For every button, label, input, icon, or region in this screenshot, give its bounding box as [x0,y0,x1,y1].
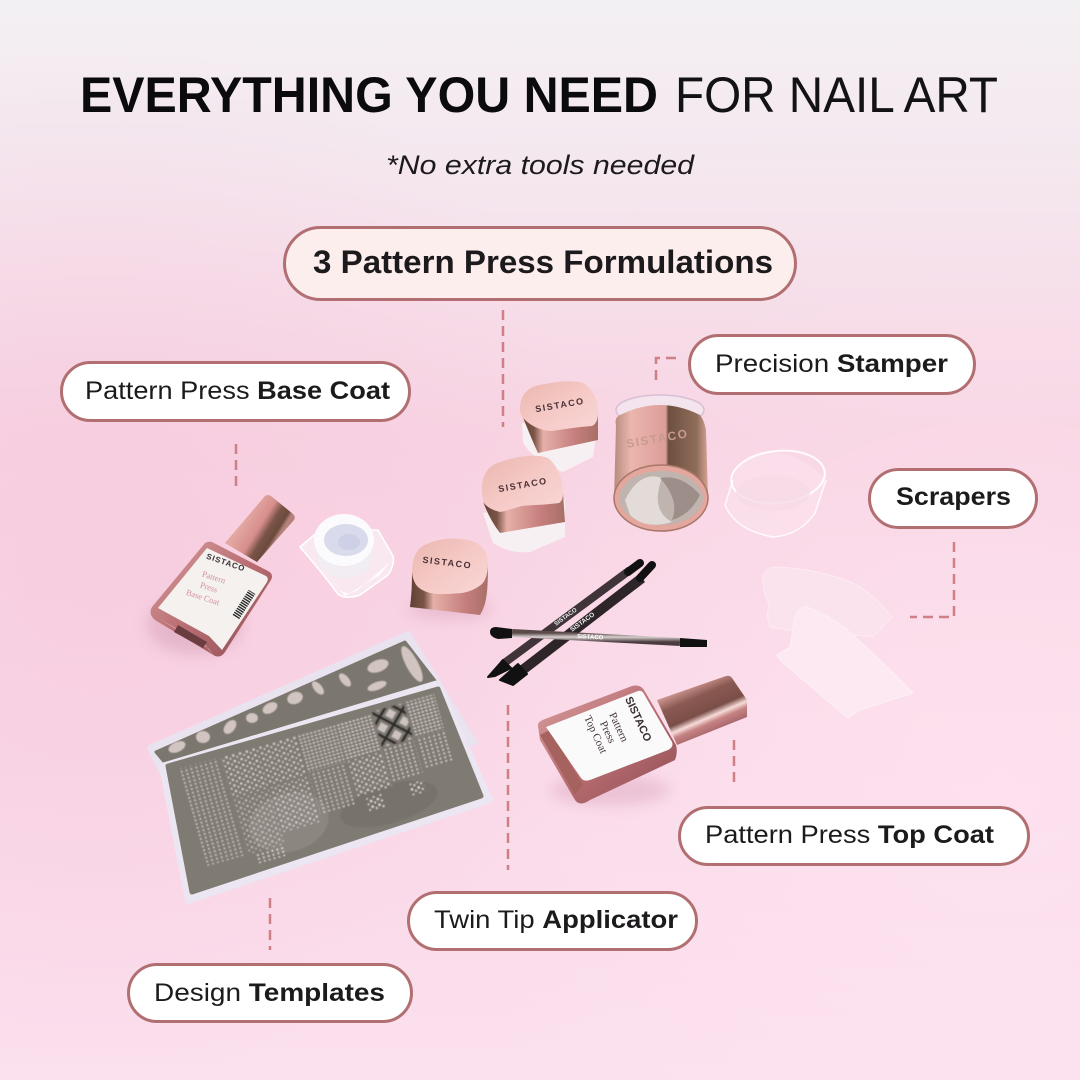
product: jar lid front [408,539,492,620]
bottle label [158,548,268,650]
bottle cap [225,495,295,562]
bottle body [538,686,677,804]
applicator diagonal one [488,563,640,677]
connector: scrapers [910,542,954,617]
connector: design templates [269,898,271,950]
product: top coat bottle: Top Coat [581,714,609,755]
label: Precision Stamper [690,336,974,394]
product: clear stamper cap [725,446,827,537]
product: precision stamper [614,395,708,532]
title: EVERYTHING YOU NEED [80,67,658,123]
scraper back [763,567,892,637]
label: Precision Stamper: Precision Stamper [715,350,948,378]
product: base coat bottle: Press [199,580,219,595]
product: design template plates [150,634,490,901]
product: top coat bottle: Press [597,719,618,745]
stamper clear head [616,395,704,425]
label: Twin Tip Applicator [408,892,696,950]
applicator diagonal two [500,565,652,685]
bottle shadow [147,595,243,655]
bottle body [151,542,272,656]
stamper body [614,405,708,532]
connector: top coat [733,740,735,785]
title [80,67,998,123]
title: FOR NAIL ART [675,67,998,123]
product: open gel jar [300,514,393,597]
product: jar lid front: SISTACO [422,555,473,571]
label: Twin Tip Applicator: Twin Tip Applicator [434,906,678,934]
connector: base coat [235,444,237,488]
applicator horizontal: SISTACO [577,634,604,641]
applicator horizontal [490,627,707,647]
label: Scrapers: Scrapers [896,483,1011,511]
connector: stamper [656,358,677,380]
product: twin tip applicators [488,563,707,685]
product: base coat bottle: Pattern [201,569,228,586]
applicator diagonal two: SISTACO [569,611,596,634]
label: 3 Pattern Press Formulations [284,228,796,300]
label: Design Templates [128,964,412,1022]
connector: formulations [502,310,504,427]
label: Pattern Press Top Coat [680,808,1028,864]
product: base coat bottle [147,495,295,657]
applicator diagonal one: SISTACO [554,607,579,628]
product: scrapers [763,567,913,718]
bottle label [546,691,672,781]
subtitle: *No extra tools needed [386,150,695,180]
back plate [150,634,474,848]
connector: twin tip applicator [507,705,509,870]
product: base coat bottle: Base Coat [185,587,222,607]
product: jar upper: SISTACO [535,396,585,414]
product: top coat bottle [538,676,747,806]
label: Pattern Press Base Coat [62,362,410,420]
label: Scrapers [870,470,1036,528]
product: jar middle [482,456,565,552]
scraper front [777,607,913,718]
product: top coat bottle: Pattern [606,711,631,744]
label: Pattern Press Base Coat: Pattern Press Base Coat [85,377,391,405]
label: Pattern Press Top Coat: Pattern Press Top Coat [705,821,995,849]
product: top coat bottle: SISTACO [622,695,654,744]
label: Design Templates: Design Templates [154,979,385,1007]
bottle shadow [550,774,670,806]
bottle cap [657,676,747,745]
product: jar upper [520,381,598,472]
product: precision stamper: SISTACO [625,426,690,451]
label: 3 Pattern Press Formulations: 3 Pattern Press Formulations [313,244,773,280]
stamper rim and pad [614,465,708,531]
front plate [162,683,490,901]
product: base coat bottle: SISTACO [205,552,246,573]
product: jar middle: SISTACO [497,476,548,494]
